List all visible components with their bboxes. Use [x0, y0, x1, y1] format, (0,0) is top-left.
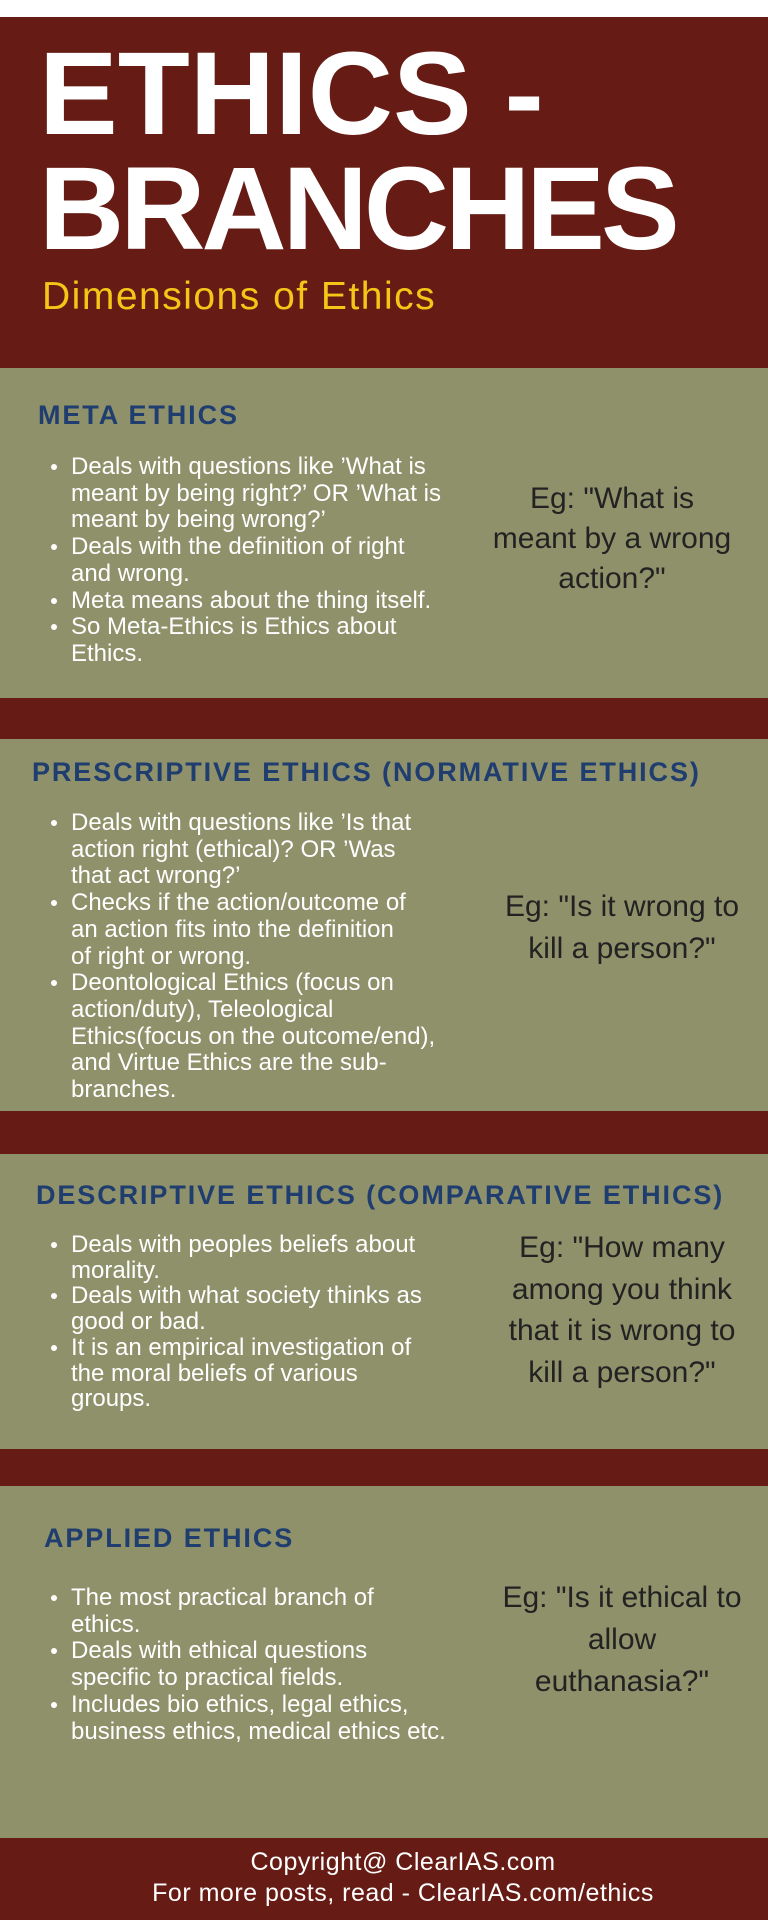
panel: applied ethics [0, 1486, 768, 1838]
heading: applied: APPLIED ETHICS [44, 1523, 294, 1553]
bullets: prescriptive: Checks if the action/outcome of [71, 889, 406, 916]
panel: meta ethics [0, 368, 768, 698]
example: applied: allow [588, 1623, 656, 1656]
bullets: prescriptive: action/duty), Teleological [71, 996, 333, 1023]
bullets: applied: business ethics, medical ethics etc. [71, 1718, 446, 1745]
heading: prescriptive: PRESCRIPTIVE ETHICS (NORMATIVE ETHICS) [32, 757, 701, 787]
heading: descriptive: DESCRIPTIVE ETHICS (COMPARATIVE ETHICS) [36, 1180, 724, 1210]
example: descriptive: Eg: "How many [519, 1231, 725, 1264]
example: prescriptive: Eg: "Is it wrong to [505, 890, 739, 923]
bullets: meta ethics: meant by being wrong?’ [71, 506, 326, 533]
footer text: For more posts, read - ClearIAS.com/ethics [152, 1879, 654, 1907]
bullets: meta ethics: Deals with questions like ’What is [71, 453, 426, 480]
subtitle: Dimensions of Ethics [42, 275, 436, 318]
example: descriptive: that it is wrong to [509, 1314, 735, 1347]
footer text [152, 1848, 654, 1907]
example: meta: Eg: "What is [530, 482, 694, 515]
bullets: descriptive: groups. [71, 1385, 151, 1412]
bullets: applied: Includes bio ethics, legal ethics, [71, 1691, 409, 1718]
divider band [0, 698, 768, 739]
header panel [0, 17, 768, 368]
title: BRANCHES [39, 143, 676, 275]
bullets: descriptive: good or bad. [71, 1308, 206, 1335]
bullets: descriptive: Deals with peoples beliefs about [71, 1231, 415, 1258]
example: applied: Eg: "Is it ethical to [502, 1581, 742, 1614]
example: descriptive [509, 1231, 735, 1388]
bullets: applied: specific to practical fields. [71, 1664, 343, 1691]
bullets: prescriptive: branches. [71, 1076, 176, 1103]
divider band [0, 1449, 768, 1486]
bullets: applied [51, 1584, 446, 1745]
example: meta [493, 482, 731, 595]
bullets: prescriptive [51, 809, 435, 1103]
bullets: descriptive: Deals with what society thinks as [71, 1282, 422, 1309]
example: meta: action?" [558, 562, 666, 595]
example: descriptive: kill a person?" [528, 1356, 716, 1388]
footer text: Copyright@ ClearIAS.com [250, 1848, 556, 1876]
panel: prescriptive ethics [0, 739, 768, 1111]
panel: descriptive ethics [0, 1154, 768, 1449]
bullets: prescriptive: and Virtue Ethics are the sub- [71, 1049, 387, 1076]
example: applied [502, 1581, 742, 1698]
example: meta: meant by a wrong [493, 522, 731, 555]
bullets: prescriptive: of right or wrong. [71, 943, 251, 970]
bullets: applied: Deals with ethical questions [71, 1637, 367, 1664]
bullets: meta ethics: meant by being right?’ OR ’What is [71, 480, 441, 507]
title [39, 28, 676, 275]
heading: meta ethics: META ETHICS [38, 400, 239, 430]
bullets: meta ethics: So Meta-Ethics is Ethics about [71, 613, 396, 640]
bullets: prescriptive: Deontological Ethics (focus on [71, 969, 394, 996]
bullets: meta ethics [51, 453, 441, 667]
bullets: prescriptive: action right (ethical)? OR ’Was [71, 836, 396, 863]
bullets: prescriptive: Ethics(focus on the outcome/end), [71, 1023, 435, 1050]
footer [0, 1838, 768, 1920]
title: ETHICS - [39, 28, 544, 160]
bullets: meta ethics: and wrong. [71, 560, 190, 587]
bullets: descriptive: morality. [71, 1257, 160, 1284]
example: descriptive: among you think [512, 1272, 732, 1306]
example: prescriptive [505, 890, 739, 965]
bullets: meta ethics: Deals with the definition of right [71, 533, 405, 560]
example: prescriptive: kill a person?" [528, 932, 716, 965]
bullets: prescriptive: that act wrong?’ [71, 862, 240, 889]
bullets: applied: The most practical branch of [71, 1584, 374, 1611]
bullets: meta ethics: Meta means about the thing itself. [71, 587, 431, 614]
bullets: prescriptive: Deals with questions like ’Is that [71, 809, 411, 836]
bullets: applied: ethics. [71, 1611, 140, 1638]
example: applied: euthanasia?" [535, 1665, 709, 1698]
bullets: meta ethics: Ethics. [71, 640, 143, 667]
bullets: descriptive: It is an empirical investigation of [71, 1334, 411, 1361]
divider band [0, 1111, 768, 1154]
bullets: descriptive [51, 1231, 422, 1412]
bullets: descriptive: the moral beliefs of various [71, 1360, 358, 1387]
bullets: prescriptive: an action fits into the definition [71, 916, 394, 943]
